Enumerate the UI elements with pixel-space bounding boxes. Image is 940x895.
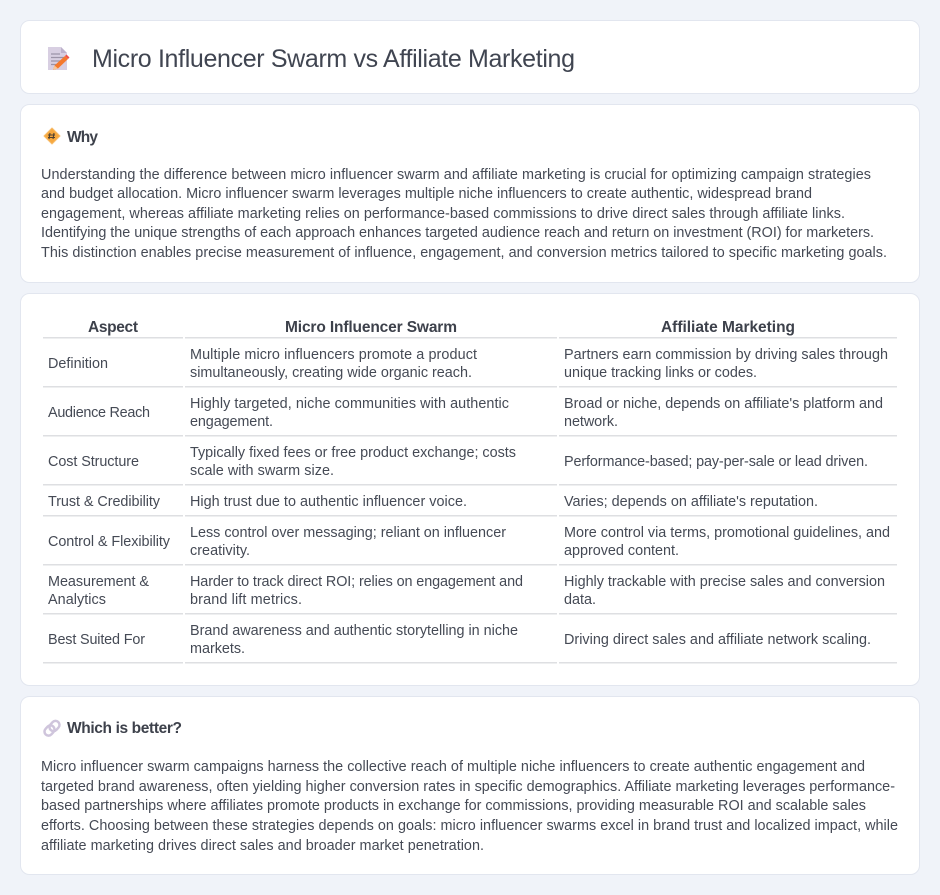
text block: why: Identifying the unique strengths of each approach enhances targeted audience reach and return on investment (ROI) for marketers. bbox=[41, 225, 874, 241]
text block: which is better: efforts. Choosing between these strategies depends on goals: micro influencer swarms excel in brand trust and localized impact, while bbox=[41, 818, 898, 834]
text block: why: This distinction enables precise measurement of influence, engagement, and conversion metrics tailored to specific marketing goals. bbox=[41, 245, 887, 261]
text block: which is better bbox=[41, 759, 898, 854]
row: control and flexibility bbox=[43, 525, 897, 566]
row: best suited for: markets. bbox=[190, 641, 245, 657]
row: audience reach: Highly targeted, niche communities with authentic bbox=[190, 396, 509, 412]
panel: why bbox=[20, 104, 920, 282]
row: best suited for: Best Suited For bbox=[48, 632, 145, 648]
row: control and flexibility: More control via terms, promotional guidelines, and bbox=[564, 525, 890, 541]
table header row: Micro Influencer Swarm bbox=[285, 319, 457, 336]
text block: which is better: Micro influencer swarm campaigns harness the collective reach of multiple niche influencers to create authentic engagement and bbox=[41, 759, 865, 775]
text block: why bbox=[41, 167, 887, 261]
text block: which is better: targeted brand awareness, often yielding higher conversion rates in specific demographics. Affiliate marketing leverages performance- bbox=[41, 779, 895, 795]
icon: link bbox=[43, 719, 61, 737]
row: best suited for bbox=[43, 623, 897, 664]
row: measurement and analytics: data. bbox=[564, 592, 596, 608]
icon: document with pencil bbox=[48, 47, 70, 70]
row: audience reach: engagement. bbox=[190, 414, 273, 430]
row: audience reach: Audience Reach bbox=[48, 405, 150, 421]
row: definition: unique tracking links or codes. bbox=[564, 365, 757, 381]
row: best suited for: Brand awareness and authentic storytelling in niche bbox=[190, 623, 518, 639]
row: cost structure: Typically fixed fees or free product exchange; costs bbox=[190, 445, 516, 461]
row: audience reach bbox=[43, 396, 897, 436]
text block: which is better: based partnerships where affiliates promote products in exchange for commissions, providing measurable ROI and scalable sales bbox=[41, 798, 866, 814]
text block: which is better: affiliate marketing drives direct sales and broader market penetration. bbox=[41, 838, 484, 854]
table header row: Affiliate Marketing bbox=[661, 319, 795, 336]
row: definition: Partners earn commission by driving sales through bbox=[564, 347, 888, 363]
heading: why: Why bbox=[67, 129, 98, 146]
row: cost structure: scale with swarm size. bbox=[190, 463, 334, 479]
row: measurement and analytics: Highly trackable with precise sales and conversion bbox=[564, 574, 885, 590]
row: cost structure: Performance-based; pay-per-sale or lead driven. bbox=[564, 454, 868, 470]
row: definition: simultaneously, creating wide organic reach. bbox=[190, 365, 472, 381]
row: measurement and analytics: Analytics bbox=[48, 592, 106, 608]
panel: header bbox=[20, 20, 920, 94]
row: trust and credibility: Varies; depends on affiliate's reputation. bbox=[564, 494, 818, 510]
heading: which is better: Which is better? bbox=[67, 720, 182, 737]
row: trust and credibility: High trust due to authentic influencer voice. bbox=[190, 494, 467, 510]
row: control and flexibility: approved content. bbox=[564, 543, 679, 559]
table header row: Aspect bbox=[88, 319, 138, 336]
panel: comparison table bbox=[20, 294, 920, 686]
table header row bbox=[43, 319, 897, 338]
row: trust and credibility bbox=[43, 494, 897, 516]
row: measurement and analytics: brand lift metrics. bbox=[190, 592, 302, 608]
row: best suited for: Driving direct sales and affiliate network scaling. bbox=[564, 632, 871, 648]
row: audience reach: network. bbox=[564, 414, 618, 430]
row: cost structure bbox=[43, 445, 897, 486]
row: trust and credibility: Trust & Credibility bbox=[48, 494, 161, 510]
row: control and flexibility: Control & Flexibility bbox=[48, 534, 171, 550]
row: definition bbox=[43, 347, 897, 388]
text block: why: Understanding the difference between micro influencer swarm and affiliate marketing is crucial for optimizing campaign strategies bbox=[41, 167, 871, 183]
row: audience reach: Broad or niche, depends on affiliate's platform and bbox=[564, 396, 883, 412]
row: measurement and analytics bbox=[43, 574, 897, 614]
row: definition: Definition bbox=[48, 356, 108, 372]
title: Micro Influencer Swarm vs Affiliate Marketing bbox=[92, 45, 575, 73]
text block: why: and budget allocation. Micro influencer swarm leverages multiple niche influencers to create authentic, widespread brand bbox=[41, 186, 812, 202]
row: measurement and analytics: Harder to track direct ROI; relies on engagement and bbox=[190, 574, 523, 590]
text block: why: engagement, whereas affiliate marketing relies on performance-based commissions to drive direct sales through affiliate links. bbox=[41, 206, 845, 222]
row: control and flexibility: creativity. bbox=[190, 543, 250, 559]
panel: which is better bbox=[20, 696, 920, 874]
row: definition: Multiple micro influencers promote a product bbox=[190, 347, 477, 363]
row: measurement and analytics: Measurement & bbox=[48, 574, 149, 590]
row: control and flexibility: Less control over messaging; reliant on influencer bbox=[190, 525, 506, 541]
icon: warning diamond bbox=[44, 128, 60, 144]
row: cost structure: Cost Structure bbox=[48, 454, 139, 470]
